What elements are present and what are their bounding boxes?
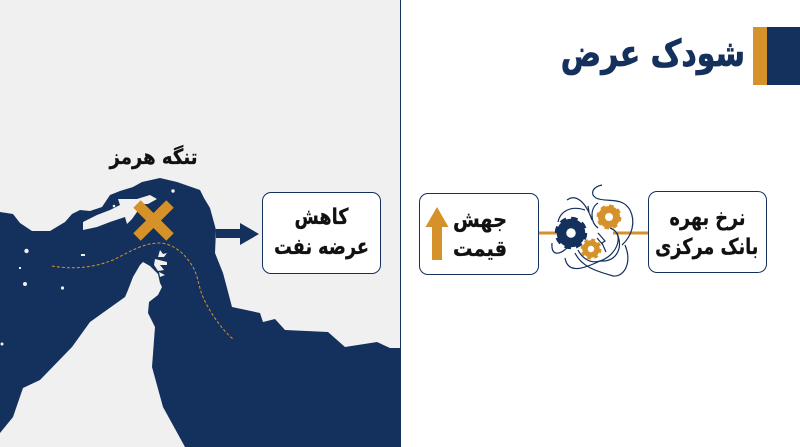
gear: gold lower [582, 240, 600, 258]
gear: gold upper [598, 206, 620, 228]
gear: navy [556, 218, 586, 248]
box: reduced oil supply [262, 192, 381, 274]
text: reduced oil supply: کاهش [295, 205, 348, 230]
text: reduced oil supply: عرضه نفت [274, 235, 369, 260]
arrow: toward reduced supply [216, 223, 259, 245]
tangled lines [552, 185, 633, 276]
icon: blocked X mark [137, 204, 170, 237]
text: central bank interest rate [655, 206, 758, 260]
label: Strait of Hormuz: تنگه هرمز [109, 145, 198, 169]
box: price jump [419, 193, 539, 275]
box: central bank interest rate [648, 191, 767, 273]
text: reduced oil supply [274, 205, 369, 260]
divider [400, 0, 401, 447]
islands: small dots [0, 189, 175, 346]
text: central bank interest rate: نرخ بهره [670, 206, 745, 231]
connector lines [539, 232, 648, 234]
text: price jump: قیمت [453, 237, 507, 262]
header block [753, 27, 800, 85]
shipping route [52, 243, 233, 339]
land and water shape [0, 178, 400, 447]
text: price jump [453, 208, 507, 262]
text: price jump: جهش [453, 208, 507, 233]
island: Qeshm [83, 195, 157, 230]
map: strait, route and block mark [0, 178, 400, 447]
text: central bank interest rate: بانک مرکزی [655, 235, 758, 260]
icon: up arrow [426, 207, 448, 260]
gold accent bar [753, 27, 767, 85]
icon: tangled gears [551, 184, 634, 277]
title: شودک عرض [561, 32, 745, 75]
panel: map of the Strait of Hormuz [0, 0, 400, 447]
